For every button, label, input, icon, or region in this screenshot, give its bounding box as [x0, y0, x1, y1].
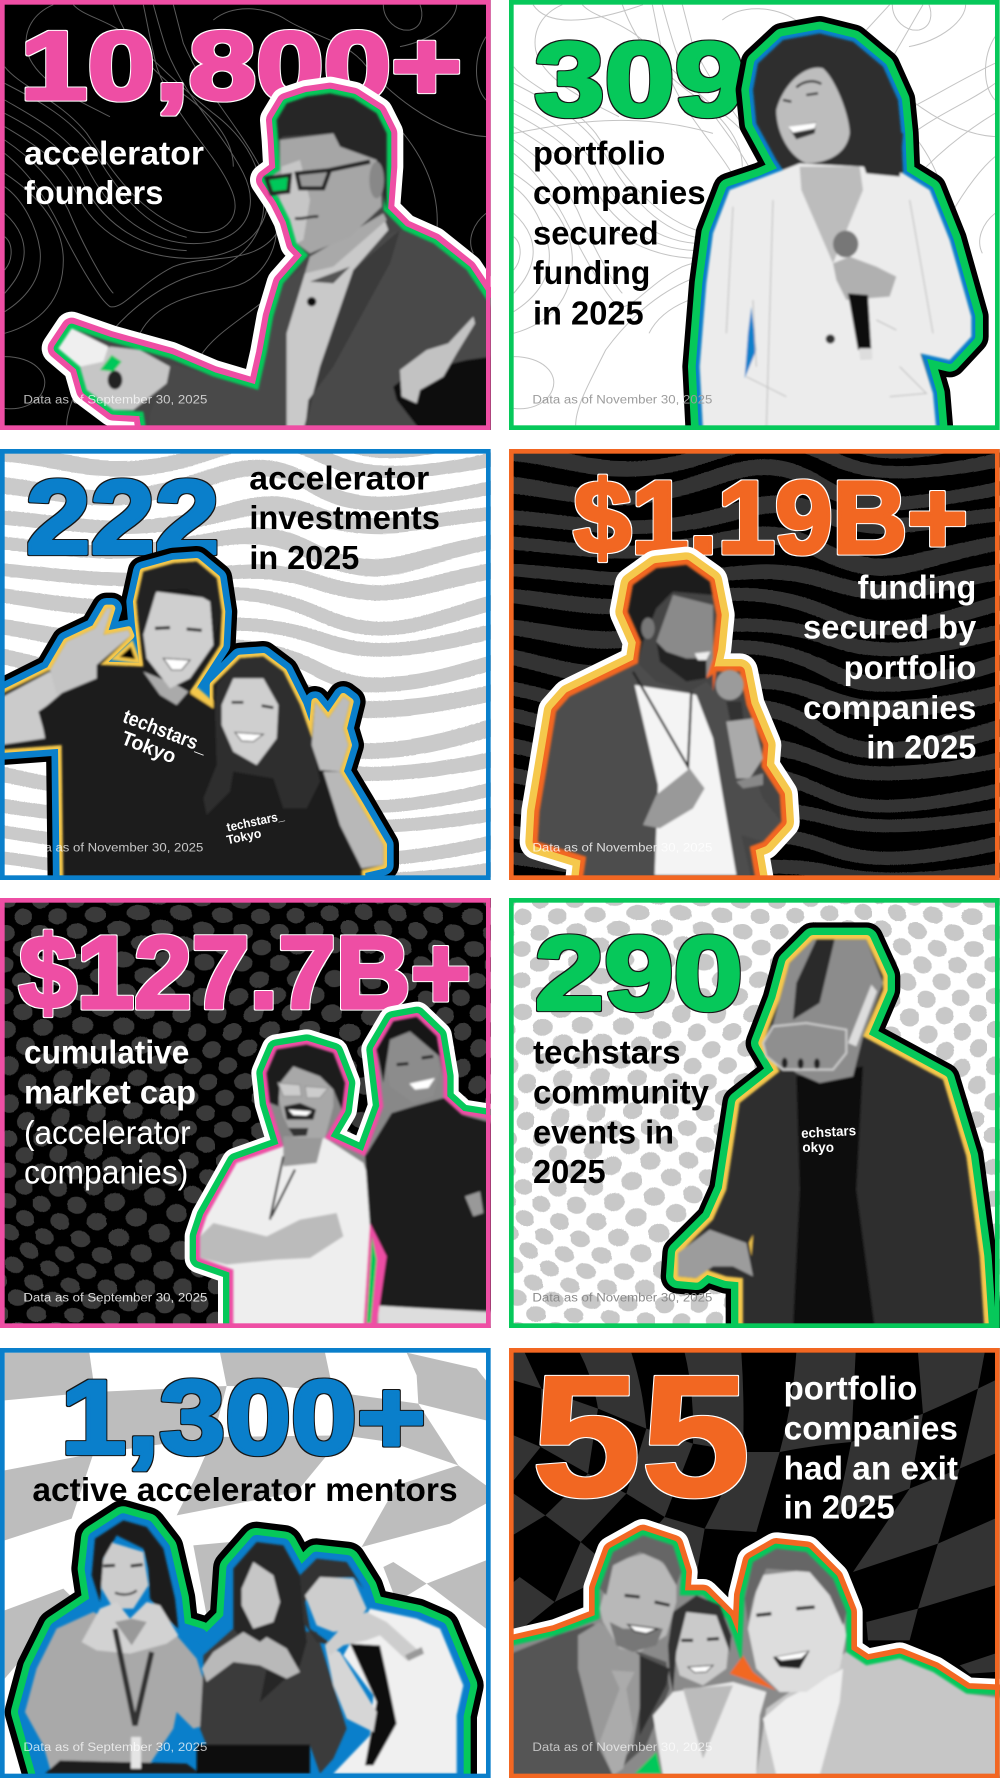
panel: 290 community events [509, 898, 1000, 1328]
caption [249, 460, 440, 577]
caption: community [533, 1075, 710, 1112]
border [2, 2, 488, 428]
panel: 309 portfolio companies [509, 0, 1000, 430]
headline number: $127.7B+ [19, 914, 471, 1030]
border [512, 1350, 998, 1776]
photo: man with glasses and outlines [58, 93, 493, 433]
caption: portfolio [533, 135, 666, 172]
caption: secured by [803, 609, 977, 646]
caption [533, 135, 706, 332]
photo: three women making heart hands [25, 1520, 463, 1778]
caption: secured [533, 215, 659, 252]
caption: in 2025 [784, 1489, 895, 1526]
headline number: 309 [535, 21, 745, 138]
caption: portfolio [844, 650, 977, 687]
background: dark wave stripes [443, 408, 1000, 944]
shirt text: echstars [801, 1122, 857, 1141]
border [512, 901, 998, 1326]
data note: Data as of November 30, 2025 [533, 1740, 713, 1754]
caption: events in [533, 1115, 674, 1152]
caption: portfolio [784, 1370, 918, 1407]
shirt text: techstars_ [120, 706, 211, 758]
shirt text [801, 1122, 857, 1155]
caption: funding [533, 255, 651, 292]
caption: had an exit [784, 1450, 958, 1487]
panel: $127.7B+ market cap [0, 898, 491, 1328]
panel: 1,300+ mentors [0, 1348, 491, 1778]
caption: companies [784, 1410, 958, 1447]
caption [784, 1370, 958, 1526]
photo: two men with crossed arms [200, 1017, 493, 1333]
caption: in 2025 [533, 295, 644, 332]
background: black contour pattern [0, 0, 491, 430]
caption [24, 135, 204, 212]
caption: companies [533, 175, 706, 212]
caption: active accelerator mentors [32, 1472, 458, 1509]
shirt text: techstars_ [225, 809, 286, 835]
background: dark checkerboard [509, 1348, 1000, 1778]
border [2, 451, 488, 878]
panel: $1.19B+ funding [509, 449, 1000, 880]
caption: companies [803, 690, 977, 727]
panel: 222 accelerator investments [0, 449, 491, 880]
caption: funding [858, 569, 977, 606]
caption: market cap [24, 1075, 196, 1112]
border [2, 901, 488, 1326]
background: light warped dots [460, 857, 1000, 1373]
photo: man wearing VR headset [678, 940, 985, 1333]
caption: in 2025 [867, 729, 977, 766]
headline number: $1.19B+ [574, 459, 968, 575]
caption: (accelerator [24, 1115, 191, 1152]
headline number: 222 [26, 459, 219, 576]
shirt text: Tokyo [225, 826, 263, 847]
background: grey wave stripes [0, 408, 567, 944]
data note: Data as of November 30, 2025 [533, 841, 713, 855]
data note: Data as of September 30, 2025 [23, 392, 208, 406]
caption [24, 1035, 196, 1192]
caption: cumulative [24, 1035, 189, 1072]
headline number: 290 [535, 916, 743, 1033]
panel: 10,800+ accelerator founders [0, 0, 491, 430]
caption: companies) [24, 1155, 188, 1192]
photo: three people taking a selfie [507, 1535, 1000, 1778]
headline number: 1,300+ [61, 1359, 426, 1476]
data note: Data as of November 30, 2025 [533, 1291, 713, 1305]
data note: Data as of November 30, 2025 [533, 392, 713, 406]
caption: investments [249, 500, 440, 537]
background: white contour pattern [509, 0, 1000, 430]
data note: Data as of September 30, 2025 [23, 1291, 208, 1305]
photo: laughing woman with microphone [700, 33, 972, 433]
background: dark warped dots [0, 857, 550, 1373]
caption: accelerator [249, 460, 429, 497]
data note: Data as of November 30, 2025 [24, 841, 204, 855]
caption: in 2025 [249, 540, 359, 577]
caption: techstars [533, 1035, 681, 1072]
panel: 55 portfolio exits [509, 1348, 1000, 1778]
shirt text [118, 706, 286, 847]
border [512, 2, 998, 428]
caption [803, 569, 977, 766]
data note: Data as of September 30, 2025 [23, 1740, 208, 1754]
shirt text: Tokyo [118, 727, 179, 768]
background: grey checkerboard [0, 1348, 491, 1778]
caption [533, 1035, 710, 1191]
photo: two people in techstars Tokyo shirts [0, 562, 383, 885]
border [2, 1350, 488, 1776]
caption: founders [24, 175, 163, 212]
border [512, 451, 998, 878]
caption: accelerator [24, 135, 204, 172]
headline number: 10,800+ [20, 12, 462, 120]
caption: 2025 [533, 1154, 606, 1191]
shirt text: okyo [803, 1139, 834, 1155]
photo: man speaking with microphone [538, 565, 782, 885]
